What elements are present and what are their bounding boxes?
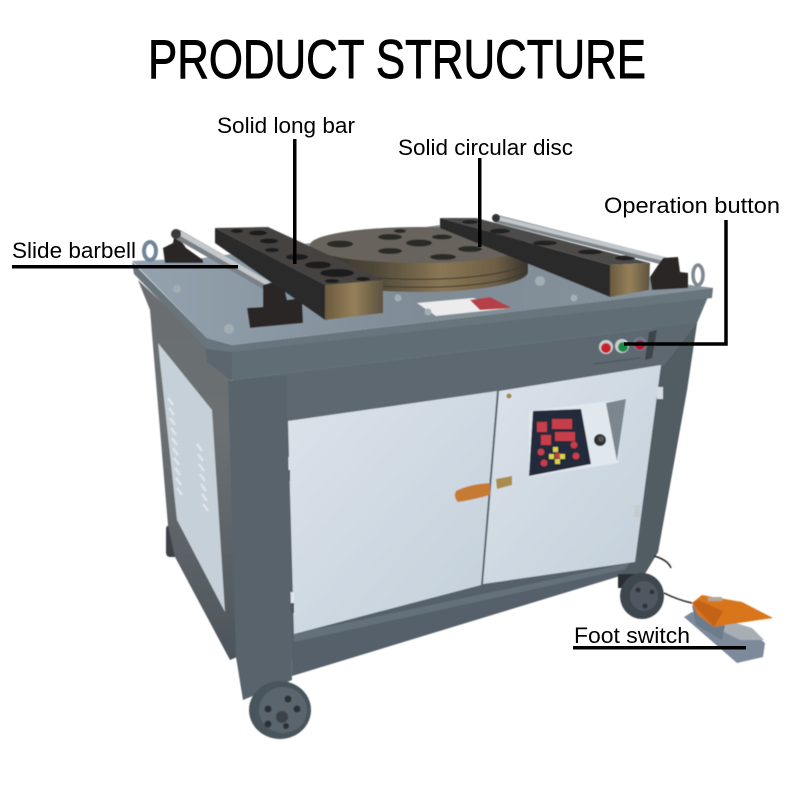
foot switch <box>684 595 773 663</box>
circular disc <box>310 227 528 292</box>
cabinet left side frame <box>138 280 237 660</box>
label: operation button: Operation button <box>604 193 780 218</box>
label: foot switch: Foot switch <box>574 623 690 648</box>
cabinet front backing <box>232 323 697 676</box>
left slide barbell <box>171 229 269 286</box>
safety label <box>417 297 512 316</box>
left long bar <box>215 227 383 320</box>
machine: rebar bending machine <box>132 214 773 739</box>
door latch <box>455 476 512 502</box>
label: slide barbell: Slide barbell <box>12 238 136 263</box>
bolts <box>173 276 578 334</box>
selector knob <box>594 434 606 446</box>
bottom bar highlight <box>294 562 635 642</box>
right door with control recess <box>483 365 661 584</box>
front right wheel <box>618 573 664 619</box>
cables <box>654 556 692 603</box>
front left bracket <box>247 283 303 328</box>
label: solid long bar <box>217 113 355 264</box>
operation buttons <box>594 330 657 364</box>
rear left wheel <box>166 525 178 557</box>
left door <box>288 391 497 634</box>
front band <box>232 297 708 380</box>
label: solid long bar: Solid long bar <box>217 113 355 138</box>
label: solid circular disc <box>398 135 573 247</box>
label: solid circular disc: Solid circular disc <box>398 135 573 160</box>
table top surface <box>132 225 714 345</box>
label: slide barbell <box>12 238 238 268</box>
right long bar <box>440 218 650 297</box>
rear left bracket <box>163 232 203 263</box>
left eye bolt <box>144 242 156 260</box>
label: foot switch <box>573 623 746 650</box>
right bracket <box>650 257 688 290</box>
upper front frame <box>232 323 697 424</box>
front left wheel <box>249 681 311 739</box>
corner chamfer <box>205 345 232 381</box>
label: operation button <box>604 193 780 344</box>
table top edge <box>132 262 713 352</box>
title: PRODUCT STRUCTURE <box>148 28 646 90</box>
right corner post <box>620 323 697 582</box>
right slide barbell <box>492 214 664 261</box>
door hinges <box>284 387 663 613</box>
cabinet left side panel <box>158 343 225 612</box>
right eye bolt <box>693 265 703 285</box>
control panel display <box>529 409 591 476</box>
front left post <box>228 375 292 700</box>
